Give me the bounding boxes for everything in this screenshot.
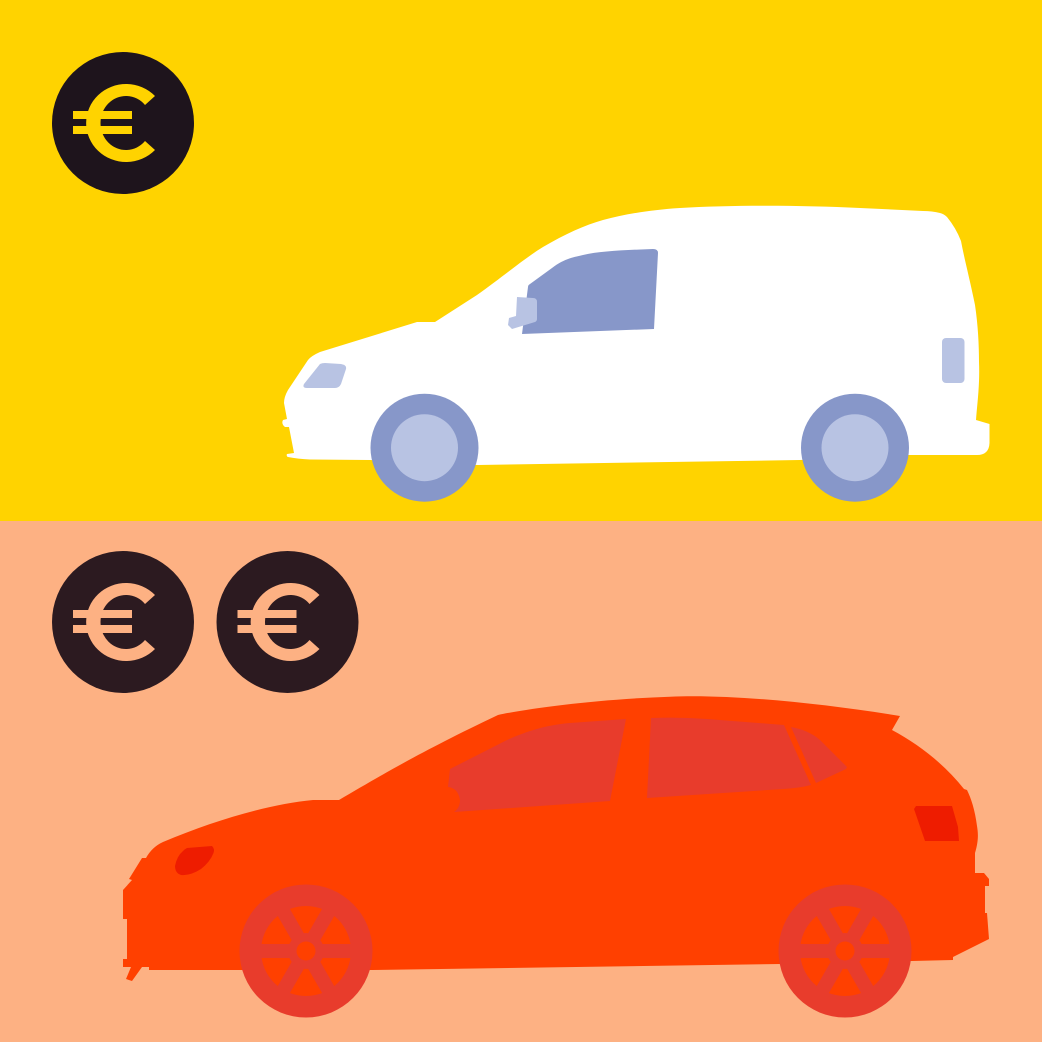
icon: euro coin one bbox=[52, 551, 194, 693]
car tail light bbox=[914, 806, 959, 841]
car rear window bbox=[791, 727, 847, 783]
panel: van (yellow) bbox=[0, 0, 1042, 521]
car front window bbox=[448, 719, 626, 812]
car rear wheel bbox=[778, 884, 912, 1018]
van front wheel bbox=[370, 394, 478, 502]
icon: euro coin bbox=[52, 52, 194, 194]
illustration: white van bbox=[282, 206, 989, 502]
van body bbox=[282, 206, 989, 465]
illustration: red car bbox=[123, 696, 989, 1018]
van mirror bbox=[508, 297, 537, 329]
car front wheel bbox=[240, 884, 372, 1018]
van headlight bbox=[303, 363, 346, 388]
van rear light bbox=[942, 338, 964, 383]
car middle window bbox=[647, 718, 811, 798]
van window bbox=[522, 249, 658, 334]
car headlight bbox=[175, 846, 214, 875]
van rear wheel bbox=[801, 394, 909, 502]
car body bbox=[123, 696, 989, 981]
panel: car (peach) bbox=[0, 521, 1042, 1042]
icon: euro coin two bbox=[216, 551, 358, 693]
